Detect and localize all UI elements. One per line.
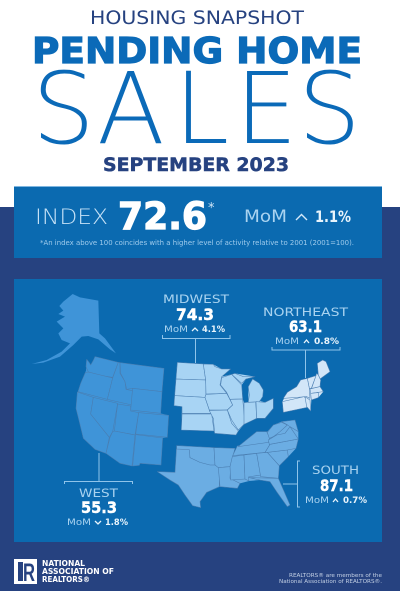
- logo: national association of realtors: [14, 559, 114, 587]
- callout: northeast: 63.1: [289, 317, 322, 336]
- logo: national association of realtors: REALTORS®: [42, 575, 90, 584]
- title: sales: SALES: [32, 52, 361, 167]
- logo: national association of realtors: R: [23, 559, 35, 587]
- panel: regional map: [14, 279, 382, 542]
- membership note: National Association of REALTORS®.: [279, 578, 382, 585]
- callout: midwest: 74.3: [176, 305, 214, 324]
- callout: northeast: MoM: [275, 337, 299, 347]
- callout: west: 55.3: [81, 498, 117, 517]
- callout: west: [64, 453, 132, 528]
- map: northeast region: [282, 360, 330, 412]
- membership note: [279, 572, 383, 585]
- callout: northeast: NORTHEAST: [263, 305, 349, 319]
- logo: national association of realtors: ASSOCIATION OF: [42, 567, 114, 576]
- title: pending home: PENDING HOME: [32, 31, 362, 72]
- panel: index: [14, 186, 382, 258]
- callout: south: [283, 461, 367, 507]
- callout: south: SOUTH: [312, 463, 359, 477]
- callout: south: 0.7%: [343, 496, 367, 506]
- callout: west: WEST: [79, 486, 119, 500]
- index label: INDEX: [35, 205, 108, 229]
- callout: midwest: MIDWEST: [163, 292, 230, 306]
- date heading: SEPTEMBER 2023: [103, 154, 289, 176]
- callout: midwest: 4.1%: [202, 325, 225, 335]
- month over month value: 1.1%: [315, 207, 351, 226]
- map: west region: [76, 357, 169, 466]
- callout: northeast: 0.8%: [314, 337, 340, 347]
- dark background band: [0, 207, 400, 591]
- eyebrow heading: HOUSING SNAPSHOT: [90, 7, 304, 29]
- map: midwest region: [174, 362, 273, 435]
- asterisk: *: [208, 201, 215, 216]
- membership note: REALTORS® are members of the: [289, 572, 383, 579]
- icon: up caret: [296, 214, 307, 220]
- callout: northeast: [263, 305, 349, 378]
- logo: national association of realtors: NATIONAL: [42, 559, 85, 568]
- map: south region: [157, 420, 298, 508]
- callout: west: 1.8%: [105, 518, 128, 528]
- callout: midwest: [162, 292, 230, 363]
- callout: south: 87.1: [320, 476, 353, 495]
- callout: south: MoM: [305, 496, 329, 506]
- footnote: *An index above 100 coincides with a higher level of activity relative to 2001 (2001=100).: [40, 239, 354, 247]
- map: alaska: [32, 294, 116, 364]
- callout: midwest: MoM: [164, 325, 188, 335]
- callout: west: MoM: [67, 518, 91, 528]
- month over month label: MoM: [244, 207, 287, 227]
- header: [32, 7, 362, 176]
- index value: 72.6: [118, 195, 207, 238]
